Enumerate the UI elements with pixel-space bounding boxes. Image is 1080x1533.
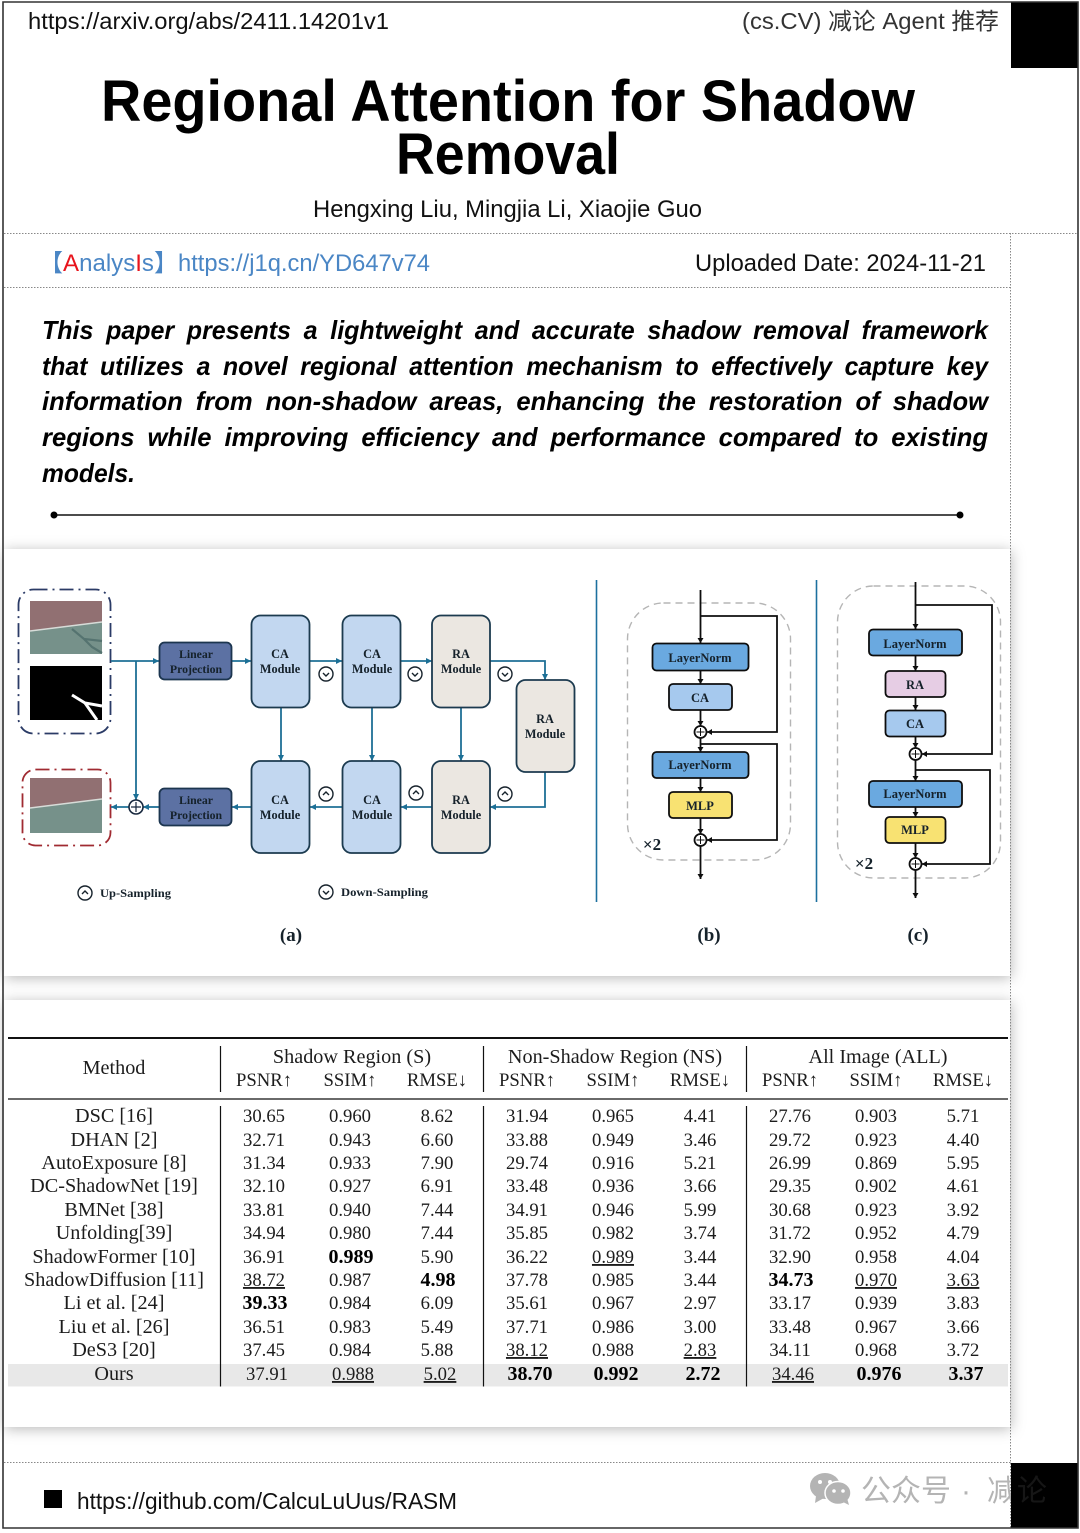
- linear projection blocks: Linear: [179, 793, 213, 807]
- abstract text: information from non-shadow areas, enhancing the restoration of shadow: [42, 386, 990, 416]
- linear projection blocks: Projection: [170, 662, 223, 676]
- row: DHAN: [71, 1129, 979, 1151]
- table header: [83, 1046, 993, 1091]
- diagram (c): [838, 582, 1000, 898]
- sampling markers: [319, 667, 512, 801]
- row: DeS3: 5.88: [421, 1340, 453, 1361]
- row: AutoExposure: 7.90: [421, 1153, 453, 1174]
- row: BMNet: 34.91: [506, 1200, 548, 1221]
- CA and RA modules: CA: [271, 793, 289, 807]
- title: Removal: [396, 122, 620, 187]
- row: DHAN: 4.40: [947, 1130, 979, 1151]
- row: Ours: 3.37: [948, 1363, 984, 1385]
- abstract text: models.: [42, 458, 135, 488]
- diagram (b): LayerNorm: [668, 758, 732, 772]
- row: ShadowFormer: 0.989: [592, 1247, 634, 1268]
- row: AutoExposure: 0.916: [592, 1153, 634, 1174]
- row: DeS3: 0.984: [329, 1340, 372, 1361]
- diagram (b): CA: [691, 691, 709, 705]
- watermark: wechat icon: [810, 1473, 851, 1505]
- row: Ours: 0.988: [332, 1364, 374, 1385]
- row: Liu et al.: 37.71: [506, 1317, 548, 1338]
- CA and RA modules: CA: [271, 647, 289, 661]
- row: DHAN: 32.71: [243, 1130, 285, 1151]
- CA and RA modules: [252, 616, 574, 853]
- row: Ours: 5.02: [424, 1364, 456, 1385]
- row: BMNet: 33.81: [243, 1200, 285, 1221]
- table header: RMSE↓: [670, 1070, 730, 1091]
- row: Unfolding: 0.952: [855, 1223, 897, 1244]
- category tag: (cs.CV) 减论 Agent 推荐: [742, 8, 999, 34]
- table header: Shadow Region (S): [273, 1046, 431, 1068]
- caption (b): (b): [697, 925, 721, 946]
- row: Liu et al.: [58, 1316, 979, 1338]
- legend: down-sampling: Down-Sampling: [341, 885, 428, 899]
- analysis link: https://j1q.cn/YD647v74: [178, 250, 430, 277]
- upload date: Uploaded Date: 2024-11-21: [695, 250, 986, 277]
- row: Li et al.: 33.17: [769, 1293, 811, 1314]
- row: ShadowDiffusion: 3.63: [947, 1270, 979, 1291]
- table header: SSIM↑: [587, 1070, 639, 1091]
- row: DHAN: 6.60: [421, 1130, 453, 1151]
- diagram (c): LayerNorm: [883, 787, 947, 801]
- row: AutoExposure: 29.74: [506, 1153, 549, 1174]
- panel: table background: [4, 1000, 1010, 1427]
- table header: RMSE↓: [407, 1070, 467, 1091]
- CA and RA modules: Module: [352, 662, 393, 676]
- row: Li et al.: 0.984: [329, 1293, 372, 1314]
- row: ShadowDiffusion: 0.970: [855, 1270, 897, 1291]
- row: Ours: [94, 1363, 984, 1385]
- table header: SSIM↑: [324, 1070, 376, 1091]
- row: BMNet: BMNet [38]: [64, 1199, 164, 1221]
- row: BMNet: 0.946: [592, 1200, 634, 1221]
- row: ShadowFormer: 3.44: [684, 1247, 717, 1268]
- diagram (b): MLP: [686, 799, 714, 813]
- diagram (b): ×2: [643, 835, 661, 854]
- row: BMNet: 0.923: [855, 1200, 897, 1221]
- abstract text: that utilizes a novel regional attention mechanism to effectively capture key: [42, 351, 989, 381]
- results table: [8, 1038, 1008, 1386]
- abstract text: This paper presents a lightweight and accurate shadow removal framework: [42, 315, 989, 345]
- linear projection blocks: [160, 642, 232, 826]
- row: ShadowDiffusion: 3.44: [684, 1270, 717, 1291]
- row: Unfolding: 4.79: [947, 1223, 979, 1244]
- table header: SSIM↑: [850, 1070, 902, 1091]
- row: Liu et al.: 0.986: [592, 1317, 634, 1338]
- row: DeS3: 0.968: [855, 1340, 897, 1361]
- row: ShadowFormer: 32.90: [769, 1247, 811, 1268]
- row: Unfolding: 0.980: [329, 1223, 371, 1244]
- figure: architecture diagram: [18, 580, 1000, 946]
- row: Ours: 0.992: [594, 1363, 638, 1385]
- row: Unfolding: 3.74: [684, 1223, 717, 1244]
- row: DHAN: 3.46: [684, 1130, 716, 1151]
- row: ShadowDiffusion: 34.73: [768, 1269, 814, 1291]
- row: DC-ShadowNet: 0.902: [855, 1176, 897, 1197]
- watermark: text: 减: [987, 1475, 1017, 1508]
- caption (a): (a): [280, 925, 302, 946]
- row: ShadowDiffusion: [24, 1269, 979, 1291]
- row: Liu et al.: 3.00: [684, 1317, 716, 1338]
- output image group: [22, 770, 110, 846]
- diagram (c): LayerNorm: [883, 637, 947, 651]
- row: BMNet: 0.940: [329, 1200, 371, 1221]
- row: DeS3: [72, 1339, 979, 1361]
- row: ShadowDiffusion: ShadowDiffusion [11]: [24, 1269, 204, 1291]
- CA and RA modules: Module: [260, 662, 301, 676]
- row: DC-ShadowNet: 3.66: [684, 1176, 716, 1197]
- row: Liu et al.: Liu et al. [26]: [58, 1316, 170, 1338]
- row: DSC: 8.62: [421, 1106, 453, 1127]
- row: DHAN: 0.943: [329, 1130, 371, 1151]
- row: DeS3: 3.72: [947, 1340, 979, 1361]
- row: Unfolding: 7.44: [421, 1223, 454, 1244]
- footer bullet: [44, 1490, 62, 1508]
- row: AutoExposure: 31.34: [243, 1153, 286, 1174]
- row: ShadowDiffusion: 37.78: [506, 1270, 548, 1291]
- CA and RA modules: Module: [352, 808, 393, 822]
- linear projection blocks: Linear: [179, 647, 213, 661]
- row: DHAN: 33.88: [506, 1130, 548, 1151]
- watermark: text: 公众号: [861, 1475, 951, 1508]
- CA and RA modules: Module: [525, 727, 566, 741]
- row: Unfolding: 34.94: [243, 1223, 286, 1244]
- row: BMNet: 3.92: [947, 1200, 979, 1221]
- row: AutoExposure: 26.99: [769, 1153, 811, 1174]
- abstract rule with end dots: [50, 512, 964, 518]
- watermark: text on black block: 论: [1017, 1475, 1047, 1508]
- row: AutoExposure: AutoExposure [8]: [41, 1152, 187, 1174]
- authors: Hengxing Liu, Mingjia Li, Xiaojie Guo: [313, 196, 702, 223]
- title: Regional Attention for Shadow: [101, 69, 916, 134]
- row: Ours: 2.72: [686, 1363, 720, 1385]
- row: DeS3: 0.988: [592, 1340, 634, 1361]
- row: Unfolding: 31.72: [769, 1223, 811, 1244]
- row: DSC: 0.960: [329, 1106, 371, 1127]
- CA and RA modules: CA: [363, 647, 381, 661]
- skip adder: [129, 800, 143, 814]
- row: DSC: 0.965: [592, 1106, 634, 1127]
- row: ShadowFormer: 36.22: [506, 1247, 548, 1268]
- analysis link: [39, 250, 430, 277]
- row: Li et al.: Li et al. [24]: [64, 1292, 164, 1314]
- CA and RA modules: Module: [260, 808, 301, 822]
- table rules: [8, 1038, 1008, 1386]
- row: DSC: 27.76: [769, 1106, 811, 1127]
- row: Ours: Ours: [94, 1363, 134, 1385]
- row: Liu et al.: 0.967: [855, 1317, 897, 1338]
- row: DeS3: DeS3 [20]: [72, 1339, 156, 1361]
- table header: PSNR↑: [762, 1070, 818, 1091]
- table header: All Image (ALL): [808, 1046, 948, 1068]
- table header: PSNR↑: [499, 1070, 555, 1091]
- row: DSC: [75, 1105, 979, 1127]
- row: ShadowDiffusion: 38.72: [243, 1270, 285, 1291]
- row: DHAN: DHAN [2]: [71, 1129, 157, 1151]
- watermark: text: [862, 1476, 1011, 1504]
- row: DSC: 4.41: [684, 1106, 716, 1127]
- row: Liu et al.: 36.51: [243, 1317, 285, 1338]
- row: Li et al.: 6.09: [421, 1293, 453, 1314]
- row: DeS3: 37.45: [243, 1340, 285, 1361]
- table header: PSNR↑: [236, 1070, 292, 1091]
- corner block: top right: [1011, 2, 1078, 68]
- connecting arrows: [111, 661, 545, 807]
- row: AutoExposure: 0.933: [329, 1153, 371, 1174]
- row: Liu et al.: 5.49: [421, 1317, 453, 1338]
- panel: figure background: [4, 549, 1010, 976]
- row: AutoExposure: 5.21: [684, 1153, 716, 1174]
- corner block: bottom right: [1011, 1463, 1078, 1528]
- row: Unfolding: Unfolding[39]: [56, 1222, 172, 1244]
- row: DC-ShadowNet: 32.10: [243, 1176, 285, 1197]
- CA and RA modules: CA: [363, 793, 381, 807]
- separators: [596, 580, 816, 902]
- row: Ours: 38.70: [508, 1363, 552, 1385]
- caption (c): (c): [907, 925, 929, 946]
- row: DHAN: 0.949: [592, 1130, 634, 1151]
- row: Li et al.: 0.939: [855, 1293, 897, 1314]
- row: Liu et al.: 33.48: [769, 1317, 811, 1338]
- row: ShadowFormer: 0.958: [855, 1247, 897, 1268]
- row: DC-ShadowNet: 29.35: [769, 1176, 811, 1197]
- row: DSC: DSC [16]: [75, 1105, 153, 1127]
- row: BMNet: [64, 1199, 979, 1221]
- row: DC-ShadowNet: DC-ShadowNet [19]: [30, 1175, 198, 1197]
- legend: up-sampling: Up-Sampling: [100, 886, 171, 900]
- diagram (b): [628, 590, 790, 879]
- diagram (c): ×2: [855, 854, 873, 873]
- row: ShadowDiffusion: 4.98: [420, 1269, 456, 1291]
- row: DC-ShadowNet: [30, 1175, 979, 1197]
- row: DSC: 30.65: [243, 1106, 285, 1127]
- row: ShadowDiffusion: 0.985: [592, 1270, 634, 1291]
- table header: Non-Shadow Region (NS): [508, 1046, 722, 1068]
- row: DC-ShadowNet: 0.936: [592, 1176, 634, 1197]
- row: Li et al.: 0.967: [592, 1293, 634, 1314]
- analysis link: 【AnalysIs】: [39, 250, 178, 277]
- row: AutoExposure: [41, 1152, 979, 1174]
- diagram (c): RA: [906, 678, 924, 692]
- row: AutoExposure: 5.95: [947, 1153, 979, 1174]
- row: ShadowFormer: 36.91: [243, 1247, 285, 1268]
- row: Unfolding: 35.85: [506, 1223, 548, 1244]
- row: Li et al.: 35.61: [506, 1293, 548, 1314]
- abstract text: [42, 315, 990, 488]
- table header: Method: [83, 1057, 145, 1079]
- row: Liu et al.: 3.66: [947, 1317, 979, 1338]
- CA and RA modules: Module: [441, 662, 482, 676]
- row: ShadowFormer: [32, 1246, 980, 1268]
- row: AutoExposure: 0.869: [855, 1153, 897, 1174]
- row: BMNet: 5.99: [684, 1200, 716, 1221]
- row: Unfolding: 0.982: [592, 1223, 634, 1244]
- arXiv link: https://arxiv.org/abs/2411.14201v1: [28, 8, 389, 34]
- row: Li et al.: 2.97: [684, 1293, 716, 1314]
- input images group: [18, 590, 110, 734]
- row: ShadowFormer: 0.989: [328, 1246, 374, 1268]
- row: Ours: 0.976: [856, 1363, 902, 1385]
- diagram (b): LayerNorm: [668, 651, 732, 665]
- row: DHAN: 29.72: [769, 1130, 811, 1151]
- row: Li et al.: 3.83: [947, 1293, 979, 1314]
- row: Ours: 37.91: [246, 1364, 288, 1385]
- row: DeS3: 2.83: [684, 1340, 716, 1361]
- watermark: text: ·: [961, 1475, 971, 1508]
- row: DSC: 31.94: [506, 1106, 549, 1127]
- row: DeS3: 38.12: [506, 1340, 548, 1361]
- row: DC-ShadowNet: 6.91: [421, 1176, 453, 1197]
- CA and RA modules: RA: [536, 712, 554, 726]
- row: BMNet: 30.68: [769, 1200, 811, 1221]
- row: DC-ShadowNet: 33.48: [506, 1176, 548, 1197]
- CA and RA modules: RA: [452, 647, 470, 661]
- row: ShadowDiffusion: 0.987: [329, 1270, 371, 1291]
- row: Ours: 34.46: [772, 1364, 814, 1385]
- row: ShadowFormer: 4.04: [947, 1247, 980, 1268]
- row: ShadowFormer: 5.90: [421, 1247, 453, 1268]
- row: DSC: 0.903: [855, 1106, 897, 1127]
- row: Unfolding: [56, 1222, 979, 1244]
- diagram (c): MLP: [901, 823, 929, 837]
- diagram (c): CA: [906, 717, 924, 731]
- row: ShadowFormer: ShadowFormer [10]: [32, 1246, 196, 1268]
- title: [101, 69, 916, 187]
- row: DC-ShadowNet: 0.927: [329, 1176, 371, 1197]
- repository link: https://github.com/CalcuLuUus/RASM: [77, 1488, 457, 1514]
- linear projection blocks: Projection: [170, 808, 223, 822]
- row: BMNet: 7.44: [421, 1200, 454, 1221]
- row: Li et al.: [64, 1292, 979, 1314]
- row: Li et al.: 39.33: [242, 1292, 288, 1314]
- row: Liu et al.: 0.983: [329, 1317, 371, 1338]
- abstract text: regions while improving efficiency and performance compared to existing: [42, 422, 988, 452]
- row: DC-ShadowNet: 4.61: [947, 1176, 979, 1197]
- CA and RA modules: Module: [441, 808, 482, 822]
- row: DSC: 5.71: [947, 1106, 979, 1127]
- table header: RMSE↓: [933, 1070, 993, 1091]
- row: DeS3: 34.11: [769, 1340, 811, 1361]
- row: DHAN: 0.923: [855, 1130, 897, 1151]
- CA and RA modules: RA: [452, 793, 470, 807]
